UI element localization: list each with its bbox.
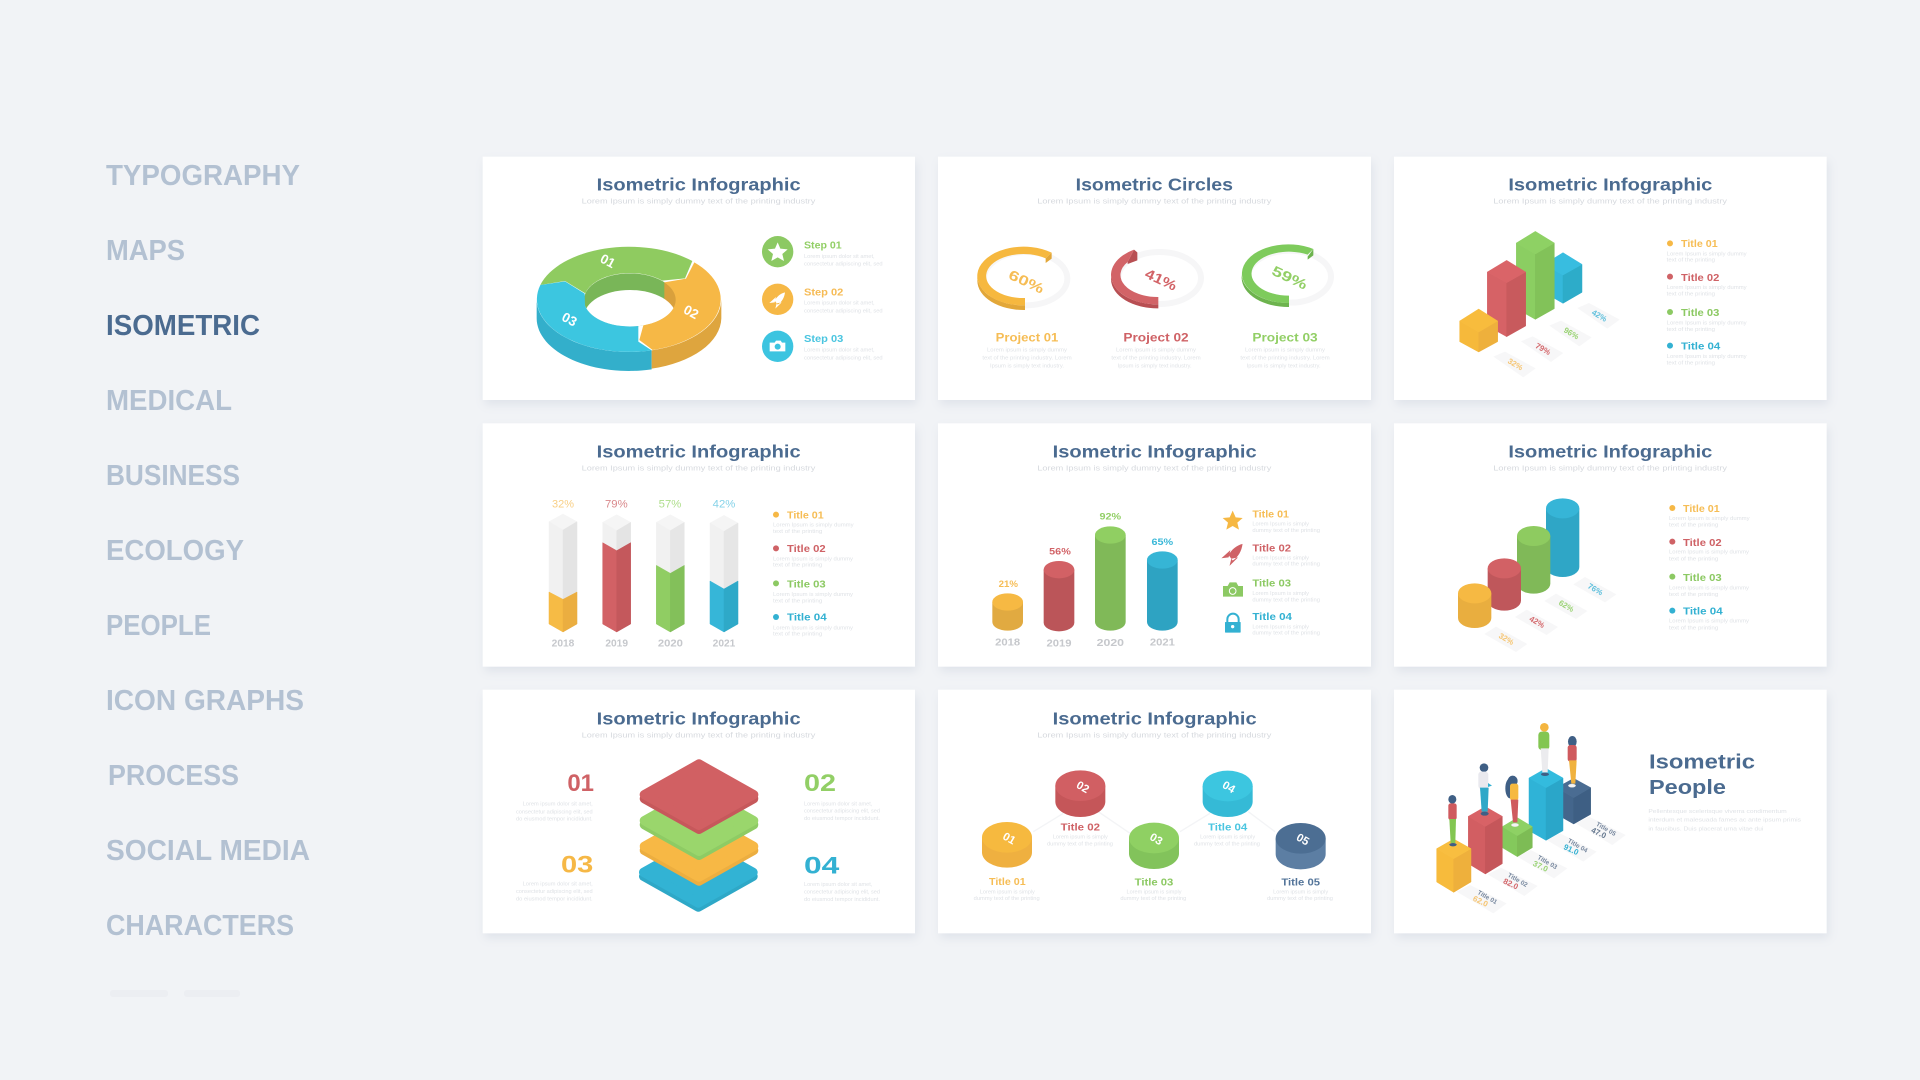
legend: Lorem Ipsum is simply dummy [773,592,853,598]
isometric donut chart: 03 [559,309,580,329]
item 04: Lorem ipsum dolor sit amet, [804,882,872,888]
bar 2020: 57%: 2020 [658,639,683,650]
project 03 [1240,332,1330,370]
item 02 [804,770,880,822]
cylinder 2021: 65%: 65% [1151,537,1174,547]
value tile: 96%: 96% [1562,326,1580,341]
isometric donut chart: 01 [598,251,618,271]
person on green cuboid [1505,776,1519,827]
legend: text of the printing [1667,360,1715,366]
cuboid: blue [1529,768,1563,840]
project 02 [1111,332,1201,370]
bar 2020: 57%: 57% [659,499,682,511]
nav item: process: PROCESS [108,760,239,792]
legend: Lorem Ipsum is simply dummy [1667,251,1747,257]
step 03 [762,331,883,362]
project 03: Ipsum is simply text industry. [1247,364,1321,370]
panel: isometric cuboid chart [1394,157,1827,400]
bar 2021: 42%: 2021 [713,639,736,650]
value tiles: 47.0 [1590,826,1608,841]
cylinder 2020: 92%: 92% [1099,511,1122,521]
step 03: Lorem ipsum dolor sit amet, [804,348,875,354]
panel: isometric circles [938,157,1371,400]
stepped cylinder chart [1458,498,1579,628]
subtitle: Lorem Ipsum is simply dummy text of the printing industry [1037,463,1272,472]
bar 2019: 79%: 2019 [605,639,629,650]
bar 2021: 42%: 42% [713,499,736,511]
step 01: Lorem ipsum dolor sit amet, [804,254,875,260]
disc 02: Title 02 [1061,823,1100,834]
progress ring: 59%: 59% [1269,262,1311,293]
item 02: Lorem ipsum dolor sit amet, [804,801,872,807]
cuboid: red [1468,807,1502,874]
legend: text of the printing [1669,625,1718,631]
item 02: consectetur adipiscing elit, sed [804,809,880,815]
value tiles: Title 04 [1566,838,1589,855]
project 03: text of the printing industry. Lorem [1240,356,1330,362]
value tile: 76%: 76% [1586,582,1604,597]
disc 05: Title 05 [1281,877,1321,888]
legend [1669,504,1750,631]
legend text: dummy text of the printing [1252,631,1320,637]
progress ring: 60% [977,247,1067,310]
value tiles: 62.0 [1471,894,1490,909]
heading: Isometric Circles [1076,175,1233,195]
icon: lock [1225,614,1241,633]
panel: stepped cylinders [1394,423,1827,667]
icon: camera [1223,582,1243,597]
disc 03: dummy text of the printing [1120,896,1186,902]
nav item: social media: SOCIAL MEDIA [106,835,310,867]
item 02: do eiusmod tempor incididunt. [804,816,880,822]
value tile: 32%: 32% [1497,631,1515,647]
cylinder 2019: 56%: 2019 [1046,639,1072,650]
bar 2018: 32% [549,499,577,650]
legend: Lorem Ipsum is simply dummy [773,556,853,562]
heading: People [1649,776,1726,799]
item 02: 02 [804,770,836,797]
cylinder 2019: 56%: 56% [1049,547,1072,557]
legend: Title 02 [1683,538,1722,549]
legend: Title 03 [1683,573,1722,584]
step 01: Step 01 [804,241,842,252]
nav item: icon graphs: ICON GRAPHS [106,685,304,717]
disc 04: Title 04 [1208,823,1248,834]
legend: Title 01 [1683,504,1720,515]
progress ring: 59% [1242,244,1331,307]
disc 03: 03 [1147,831,1164,848]
item 04: do eiusmod tempor incididunt. [804,897,880,903]
disc 04: dummy text of the printing [1194,842,1260,848]
legend: text of the printing [773,563,822,569]
cylinder 2021: 65% [1147,537,1178,649]
disc 02: Lorem ipsum is simply [1053,835,1108,841]
progress ring: 41%: 41% [1143,265,1180,294]
project 01: Ipsum is simply text industry. [990,364,1064,370]
item 04: consectetur adipiscing elit, sed [804,890,880,896]
item 01: 01 [567,770,594,797]
disc 05 [1267,823,1333,902]
legend text: Lorem Ipsum is simply [1252,555,1309,561]
value tiles: 82.0 [1502,877,1520,892]
legend: Lorem Ipsum is simply dummy [1669,586,1749,592]
progress ring: 41% [1111,250,1201,308]
value tile: 79%: 79% [1534,341,1552,357]
legend text: Lorem Ipsum is simply [1252,591,1309,597]
nav item: isometric (active): ISOMETRIC [106,310,260,342]
item 01: Lorem ipsum dolor sit amet, [523,802,593,808]
legend text: Title 03 [1252,579,1292,590]
legend text: Lorem Ipsum is simply [1252,522,1309,528]
subtitle: Lorem Ipsum is simply dummy text of the printing industry [1037,197,1272,206]
legend: Lorem Ipsum is simply dummy [1667,354,1747,360]
panel: stacked layers [483,690,915,933]
disc 02: dummy text of the printing [1047,842,1113,848]
item 03: 03 [561,852,593,879]
project 02: Ipsum is simply text industry. [1118,364,1192,370]
legend: text of the printing [1669,556,1718,562]
disc 02: 02 [1074,779,1091,796]
sidebar: category navigation [106,160,310,997]
step 03: Step 03 [804,334,844,345]
value tile: 96% [1549,321,1592,346]
legend text: Title 01 [1252,510,1290,521]
legend: Title 04 [1681,341,1721,352]
legend: Lorem Ipsum is simply dummy [1667,321,1747,327]
value tile: 76% [1573,577,1616,602]
heading: Isometric Infographic [1053,441,1257,461]
step 02: Lorem ipsum dolor sit amet, [804,301,875,307]
project 02: Project 02 [1123,332,1189,345]
nav item: medical: MEDICAL [106,385,232,417]
disc 04: 04 [1220,779,1238,796]
heading: Isometric Infographic [1508,175,1712,195]
person on blue cuboid [1538,723,1549,776]
project 02: text of the printing industry. Lorem [1111,356,1201,362]
cylinder 2018: 21% [992,579,1023,649]
disc 01: Title 01 [989,877,1026,888]
legend: Title 01 [1681,239,1718,250]
disc 05: dummy text of the printing [1267,896,1333,902]
heading: Isometric Infographic [1508,441,1712,461]
value tile: 79% [1521,336,1563,362]
step 02 [762,284,883,315]
project 01: Project 01 [996,332,1059,345]
faded nav item placeholder [110,990,240,997]
cuboid: green [1502,818,1532,857]
legend: Title 03 [787,579,826,590]
legend text: Title 04 [1252,612,1293,623]
legend: text of the printing [1667,258,1715,264]
icon: rocket [1221,544,1243,566]
disc 03: Lorem ipsum is simply [1126,889,1182,895]
value tiles: 91.0 [1562,842,1581,857]
step 01: consectetur adipiscing elit, sed [804,262,883,268]
disc 05: Lorem ipsum is simply [1273,889,1329,895]
isometric donut chart [537,247,721,371]
legend [1667,239,1747,366]
legend: text of the printing [1667,291,1715,297]
nav item: ecology: ECOLOGY [106,535,244,567]
subtitle: Lorem Ipsum is simply dummy text of the printing industry [582,197,816,206]
bar 2018: 32%: 32% [552,499,574,511]
icon: star [1223,511,1243,530]
panel: donut steps [483,157,915,400]
item 04: 04 [804,852,840,879]
disc 02 [1047,770,1113,848]
bar 2019: 79%: 79% [605,499,628,511]
disc 03 [1120,823,1186,902]
step 02: consectetur adipiscing elit, sed [804,308,883,314]
person on red cuboid [1478,763,1492,816]
project 02: Lorem ipsum is simply dummy [1116,348,1196,354]
legend: text of the printing [1667,327,1715,333]
panel: isometric people [1394,690,1827,933]
item 03 [516,852,593,903]
legend: Lorem Ipsum is simply dummy [773,523,854,529]
panel: cylinders by year with icons [938,423,1371,667]
legend: Title 03 [1681,308,1720,319]
value tiles: Title 01 [1476,889,1499,906]
item 01: consectetur adipiscing elit, sed [516,809,593,815]
value tile: 32% [1493,352,1536,377]
connector lines [1033,812,1275,833]
description: Pellentesque scelerisque viverra condimentum [1648,809,1787,815]
legend: Lorem Ipsum is simply dummy [1669,516,1750,522]
cylinder 2018: 21%: 21% [999,579,1019,589]
disc 01 [974,822,1040,902]
disc 04: Lorem ipsum is simply [1200,835,1256,841]
cuboid: navy [1557,778,1591,824]
cylinder 2019: 56% [1044,547,1074,650]
item 01: do eiusmod tempor incididunt. [516,817,593,823]
subtitle: Lorem Ipsum is simply dummy text of the printing industry [1493,197,1727,206]
value tile: 32% [1484,627,1527,652]
description [1648,809,1801,832]
bar 2021: 42% [710,499,738,650]
person on yellow cuboid [1448,795,1457,846]
person on navy cuboid [1568,736,1577,787]
disc 05: 05 [1294,832,1311,848]
cylinder 2021: 65%: 2021 [1150,638,1176,649]
disc 04 [1194,771,1260,848]
item 03: do eiusmod tempor incididunt. [516,897,593,903]
value tile: 42% [1515,610,1558,635]
description: in faucibus. Duis placerat urna vitae dui [1648,826,1763,832]
value tile: 62% [1544,594,1587,619]
item 01 [516,770,594,823]
legend: Lorem Ipsum is simply dummy [1667,285,1747,291]
cuboid: yellow [1437,839,1471,892]
subtitle: Lorem Ipsum is simply dummy text of the printing industry [582,463,816,472]
disc 01: Lorem ipsum is simply [980,889,1035,895]
value tile: 62%: 62% [1557,598,1575,614]
project 03: Project 03 [1252,332,1318,345]
progress ring: 60%: 60% [1006,266,1047,297]
legend [773,510,854,638]
legend: Title 02 [1681,273,1719,284]
heading: Isometric Infographic [1053,708,1257,728]
item 03: Lorem ipsum dolor sit amet, [523,882,593,888]
cuboid bars [1460,231,1582,352]
panel: vertical bars by year [483,423,915,667]
panel: disc process [938,690,1371,933]
project 01 [982,332,1072,370]
legend text: dummy text of the printing [1252,528,1320,534]
legend text: dummy text of the printing [1252,597,1320,603]
subtitle: Lorem Ipsum is simply dummy text of the printing industry [1037,730,1272,739]
disc 01: 01 [1000,831,1017,847]
legend: text of the printing [773,598,822,604]
subtitle: Lorem Ipsum is simply dummy text of the printing industry [582,730,816,739]
disc 01: dummy text of the printing [974,896,1040,902]
description: interdum et malesuada fames ac ante ipsum primis [1648,818,1801,824]
cylinder 2020: 92% [1095,511,1126,649]
legend text [1252,510,1320,637]
legend: text of the printing [1669,523,1718,529]
legend: text of the printing [773,529,822,535]
isometric donut chart: 02 [681,302,701,322]
legend: Title 04 [787,613,827,624]
value tiles: Title 03 [1536,854,1559,871]
legend: Lorem Ipsum is simply dummy [1669,619,1749,625]
value tiles: Title 02 [1506,872,1529,889]
nav item: maps: MAPS [106,235,185,267]
legend text: Title 02 [1252,544,1291,555]
legend text: dummy text of the printing [1252,562,1320,568]
disc 03: Title 03 [1135,877,1174,888]
value tiles [1457,817,1626,913]
heading: Isometric Infographic [597,441,801,461]
heading: Isometric Infographic [597,708,801,728]
heading [1649,750,1755,799]
legend: text of the printing [1669,592,1718,598]
nav item: typography: TYPOGRAPHY [106,160,300,192]
value tile: 32%: 32% [1506,357,1524,372]
legend text: Lorem Ipsum is simply [1252,624,1309,630]
cylinder 2018: 21%: 2018 [995,638,1021,649]
nav item: people: PEOPLE [106,610,211,642]
bar 2019: 79% [603,499,631,650]
step 03: consectetur adipiscing elit, sed [804,355,883,361]
step 02: Step 02 [804,288,843,299]
legend: Title 01 [787,510,824,521]
value tiles: Title 05 [1595,821,1617,838]
subtitle: Lorem Ipsum is simply dummy text of the printing industry [1493,463,1727,472]
heading: Isometric Infographic [597,175,801,195]
bar 2020: 57% [656,499,684,650]
stacked isometric plates [644,764,754,907]
legend: Title 04 [1683,607,1723,618]
item 03: consectetur adipiscing elit, sed [516,889,593,895]
legend: Lorem Ipsum is simply dummy [1669,550,1749,556]
nav item: business: BUSINESS [106,460,240,492]
bar 2018: 32%: 2018 [552,639,575,650]
nav item: characters: CHARACTERS [106,910,294,942]
value tile: 42% [1577,303,1620,329]
value tiles: 37.0 [1531,859,1550,874]
project 03: Lorem ipsum is simply dummy [1245,348,1325,354]
legend: text of the printing [773,632,822,638]
step 01 [762,236,883,268]
cylinder 2020: 92%: 2020 [1097,638,1124,649]
legend: Lorem Ipsum is simply dummy [773,625,853,631]
project 01: Lorem ipsum is simply dummy [987,348,1067,354]
value tile: 42%: 42% [1590,308,1608,324]
project 01: text of the printing industry. Lorem [982,356,1072,362]
item 04 [804,852,880,903]
value tile: 42%: 42% [1528,614,1546,630]
legend: Title 02 [787,544,826,555]
heading: Isometric [1649,750,1755,773]
